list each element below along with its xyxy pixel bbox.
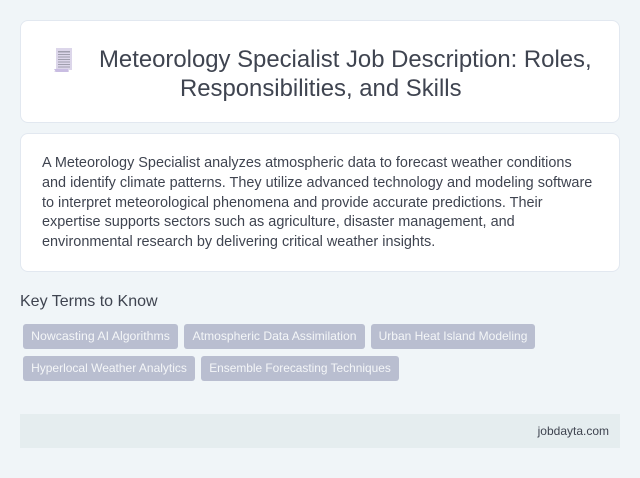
tag: hyperlocal [23, 356, 195, 381]
tag: assimilation: Atmospheric Data Assimilation [193, 329, 356, 343]
tag: nowcasting: Nowcasting AI Algorithms [31, 329, 170, 343]
tag: nowcasting [23, 324, 178, 349]
tag: assimilation [184, 324, 365, 349]
tag: hyperlocal: Hyperlocal Weather Analytics [31, 361, 187, 375]
text block: description: A Meteorology Specialist analyzes atmospheric data to forecast weather conditions [42, 155, 572, 171]
tag: ensemble: Ensemble Forecasting Techniques [209, 361, 391, 375]
footer bar [20, 414, 620, 448]
title: Meteorology Specialist Job Description: Roles, [99, 46, 592, 73]
title: Responsibilities, and Skills [180, 75, 462, 102]
text block: description [42, 155, 592, 250]
panel: title card [20, 20, 620, 123]
tag: urban heat: Urban Heat Island Modeling [379, 329, 527, 343]
tag list [23, 324, 535, 381]
title [99, 46, 592, 102]
text block: description: expertise supports sectors such as agriculture, disaster management, and [42, 214, 515, 230]
tag: ensemble [201, 356, 399, 381]
text block: description: to interpret meteorological phenomena and provide accurate predictions. Their [42, 195, 543, 211]
icon: document scroll [54, 48, 72, 72]
heading: key terms: Key Terms to Know [20, 293, 158, 310]
footer text: jobdayta.com [538, 424, 609, 438]
tag: urban heat [371, 324, 535, 349]
text block: description: environmental research by delivering critical weather insights. [42, 234, 435, 250]
text block: description: and identify climate patterns. They utilize advanced technology and modeling software [42, 175, 592, 191]
panel: description card [20, 133, 620, 272]
